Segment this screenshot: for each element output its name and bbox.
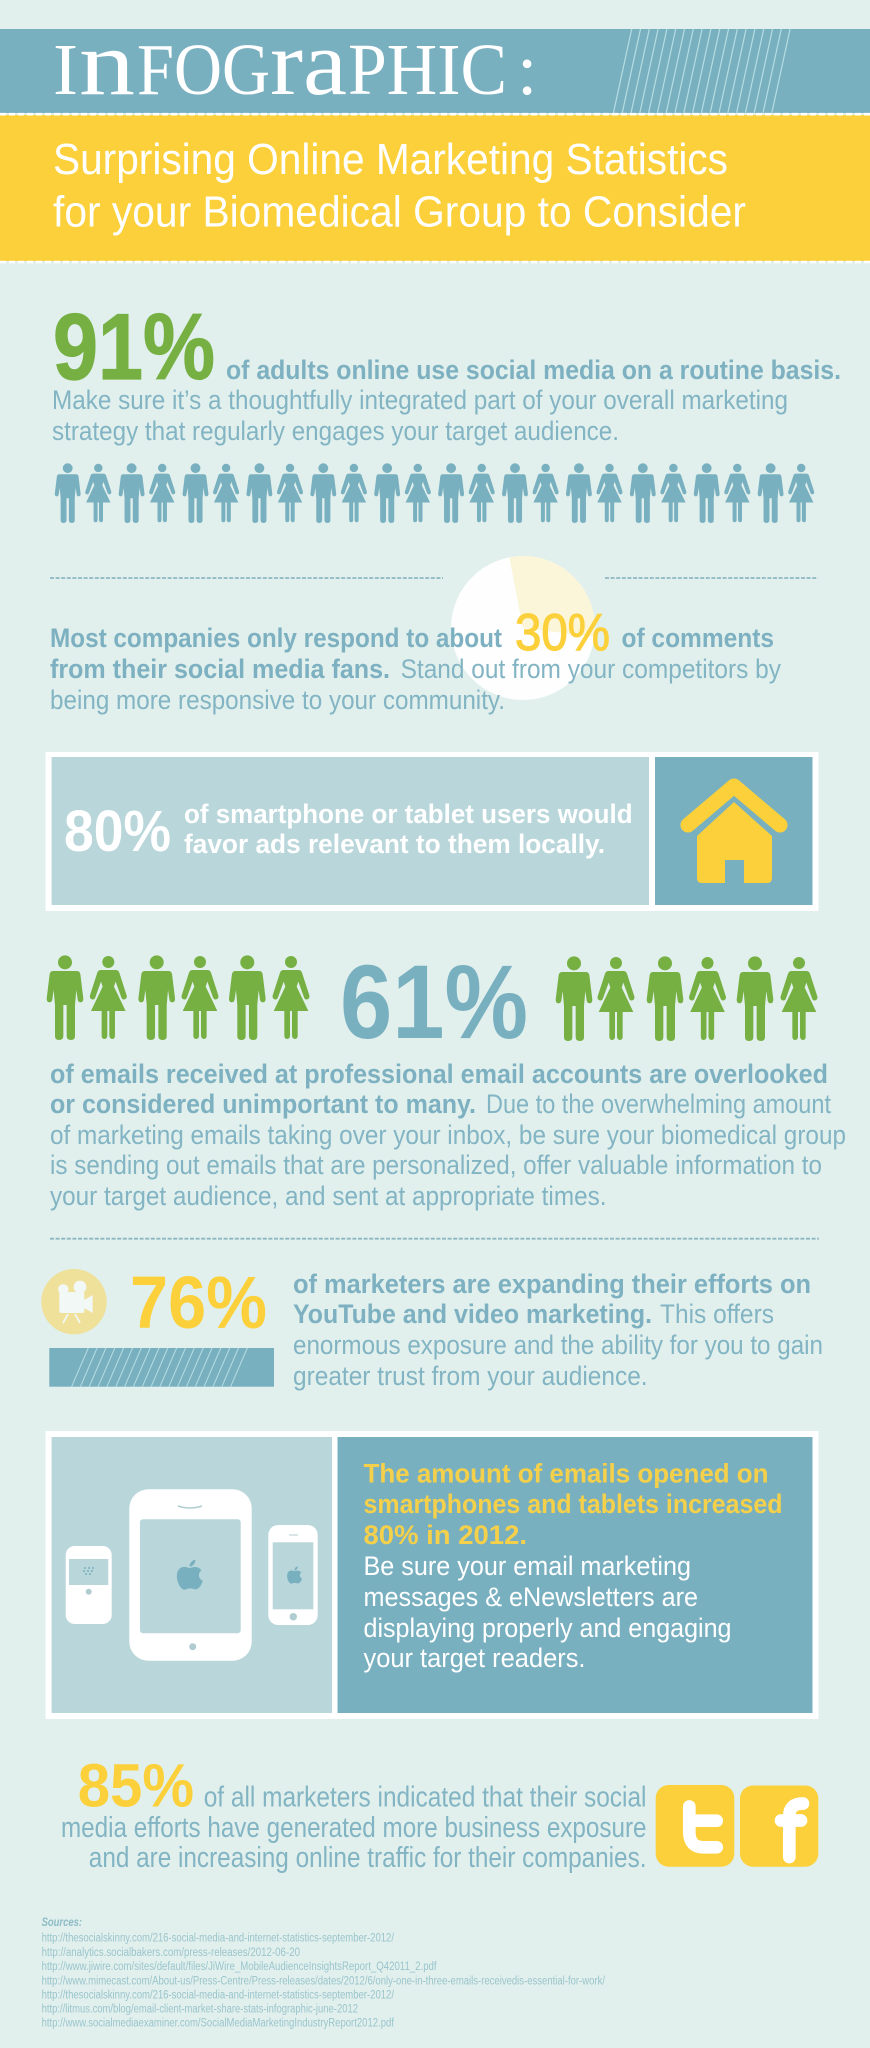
source links: http://litmus.com/blog/email-client-market-share-stats-infographic-june-2012	[42, 2004, 358, 2016]
callout body: displaying properly and engaging	[364, 1613, 732, 1643]
text block: 76% marketers: This offers	[660, 1299, 774, 1329]
sources heading: Sources:	[42, 1917, 82, 1929]
80% figure: 80%	[64, 799, 171, 864]
icon: tablet	[129, 1489, 252, 1661]
body text: Stand out from your competitors by	[401, 654, 781, 684]
stat: 85% marketers	[61, 1752, 646, 1874]
source links: http://www.socialmediaexaminer.com/SocialMediaMarketingIndustryReport2012.pdf	[42, 2018, 395, 2030]
title: ra	[270, 12, 347, 114]
icon: video camera	[41, 1269, 107, 1334]
callout heading: smartphones and tablets increased	[364, 1489, 782, 1519]
stat: 30% comments: from their social media fans.	[50, 654, 390, 684]
61% figure: 61%	[340, 944, 528, 1061]
callout body: your target readers.	[364, 1643, 586, 1673]
callout body	[364, 1551, 732, 1673]
stat: 30% comments	[50, 604, 781, 715]
text block: 76% marketers: of marketers are expanding their efforts on	[293, 1269, 811, 1299]
source links: http://thesocialskinny.com/216-social-media-and-internet-statistics-september-2012/	[42, 1989, 395, 2001]
people group: green right	[556, 956, 817, 1041]
callout body: messages & eNewsletters are	[364, 1582, 698, 1612]
text block: 61% emails: or considered unimportant to many.	[50, 1089, 476, 1119]
text block: 61% emails: your target audience, and sent at appropriate times.	[50, 1181, 606, 1211]
title: PHIC	[348, 29, 507, 110]
source links: http://www.jiwire.com/sites/default/files/JiWire_MobileAudienceInsightsReport_Q42011_2.pdf	[42, 1961, 437, 1973]
subtitle band	[0, 115, 870, 261]
icon: twitter	[656, 1785, 734, 1867]
band stripes	[613, 29, 790, 113]
sources	[42, 1917, 606, 2030]
people group: green left	[47, 955, 309, 1040]
text block: 76% marketers: greater trust from your audience.	[293, 1361, 648, 1391]
title: I	[53, 29, 78, 110]
stat: 30% comments: of comments	[622, 623, 774, 653]
callout heading: The amount of emails opened on	[364, 1459, 768, 1489]
text block: 76% marketers: enormous exposure and the ability for you to gain	[293, 1330, 823, 1360]
30% figure: 30%	[515, 604, 610, 662]
body text: strategy that regularly engages your target audience.	[52, 416, 619, 446]
text block: 76% marketers: YouTube and video marketing.	[293, 1299, 652, 1329]
callout heading: 80% in 2012.	[364, 1520, 527, 1550]
body text: of all marketers indicated that their social	[204, 1782, 646, 1814]
statement: favor ads relevant to them locally.	[184, 829, 605, 859]
body text	[52, 385, 788, 446]
subtitle	[53, 135, 746, 236]
body text: and are increasing online traffic for their companies.	[89, 1842, 647, 1874]
callout body: Be sure your email marketing	[364, 1551, 691, 1581]
statement	[184, 799, 633, 859]
icon: house	[688, 786, 780, 883]
source links: http://thesocialskinny.com/216-social-media-and-internet-statistics-september-2012/	[42, 1933, 395, 1945]
icon: smartphone	[268, 1525, 318, 1625]
title	[53, 12, 537, 114]
body text: Make sure it’s a thoughtfully integrated part of your overall marketing	[52, 385, 788, 415]
source links: http://www.mimecast.com/About-us/Press-Centre/Press-releases/dates/2012/6/only-one-in-three-emails-receivedis-essential-for-work/	[42, 1975, 606, 1987]
statement: of adults online use social media on a routine basis.	[226, 355, 841, 385]
text block: 61% emails	[50, 1059, 846, 1211]
91% figure: 91%	[53, 294, 215, 399]
people row: teal	[55, 463, 814, 523]
icon: blackberry phone	[66, 1546, 112, 1624]
body text	[61, 1782, 646, 1874]
statement: of smartphone or tablet users would	[184, 799, 633, 829]
icon: facebook	[740, 1786, 818, 1867]
title band	[0, 29, 870, 113]
panel: mobile email opens	[46, 1431, 818, 1719]
title: FOG	[137, 29, 270, 110]
panel: 80% smartphone users	[46, 752, 818, 911]
body text	[50, 654, 781, 715]
text block: 76% marketers	[293, 1269, 823, 1391]
subtitle: for your Biomedical Group to Consider	[53, 188, 746, 236]
header banner	[0, 12, 870, 262]
body text: being more responsive to your community.	[50, 685, 505, 715]
stat: 91% social media	[52, 294, 841, 446]
subtitle: Surprising Online Marketing Statistics	[53, 135, 728, 184]
source links	[42, 1933, 606, 2030]
striped bar	[49, 1348, 274, 1387]
text block: 61% emails: of emails received at professional email accounts are overlooked	[50, 1059, 828, 1089]
76% figure: 76%	[130, 1261, 267, 1344]
85% figure: 85%	[78, 1752, 194, 1820]
title: :	[517, 29, 537, 110]
body text: media efforts have generated more business exposure	[61, 1812, 646, 1844]
chart: 30% pie	[451, 556, 595, 700]
source links: http://analytics.socialbakers.com/press-releases/2012-06-20	[42, 1947, 300, 1959]
callout heading	[364, 1459, 782, 1550]
statement: Most companies only respond to about	[50, 623, 502, 653]
title: n	[79, 12, 135, 114]
